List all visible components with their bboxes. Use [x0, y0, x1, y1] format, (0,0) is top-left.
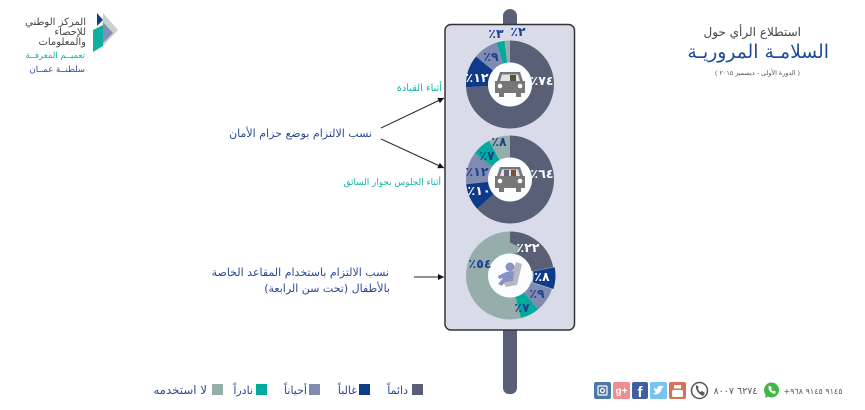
value labels: ٦٤٪ [531, 166, 553, 181]
logo [25, 13, 118, 75]
legend: أحياناً [284, 382, 307, 397]
legend: غالباً [338, 382, 357, 397]
value labels: ٣٪ [488, 26, 504, 41]
logo text: المركز الوطني [25, 17, 86, 28]
value labels: ٩٪ [483, 49, 499, 64]
value labels: ٢٢٪ [517, 240, 540, 255]
logo mark [93, 13, 118, 52]
legend: دائماً [387, 382, 408, 397]
value labels: ٢٪ [510, 24, 526, 39]
label: passenger seat: أثناء الجلوس بجوار السائق [344, 176, 441, 188]
value labels: ١٢٪ [466, 164, 489, 179]
traffic light panel [445, 24, 574, 330]
logo text: والمعلومات [38, 37, 86, 48]
icon: car with driver [495, 72, 525, 97]
value labels: ١٠٪ [468, 183, 490, 198]
callout: child seat compliance [212, 266, 390, 295]
donut: seat belt while driving [466, 24, 553, 121]
traffic light pole [503, 9, 517, 394]
value labels: ٧٤٪ [531, 73, 553, 88]
logo tagline: تعميــم المعرفــة [25, 51, 86, 61]
title block [687, 24, 829, 77]
logo text: للإحصاء [54, 27, 86, 38]
legend [153, 382, 423, 397]
value labels: ٩٪ [529, 286, 545, 301]
donut: child seat use [469, 240, 550, 315]
callout: seat belt compliance: نسب الالتزام بوضع حزام الأمان [229, 126, 372, 140]
contact details [692, 382, 843, 398]
icon: whatsapp [764, 382, 779, 398]
value labels: ٧٪ [514, 300, 530, 315]
legend: لا استخدمه [153, 383, 207, 397]
value labels [469, 240, 550, 315]
whatsapp number: +٩٦٨ ٩١٤٥ ٩١٤٥ [783, 387, 843, 396]
arrow: to child seat donut [414, 276, 444, 278]
social icons: g+ [616, 386, 628, 397]
value labels: ٧٪ [479, 148, 495, 163]
value labels: ١٢٪ [466, 70, 489, 85]
phone number: ٨٠٠٧ ٦٢٧٤ [714, 386, 757, 397]
arrow: to driving donut [381, 98, 444, 128]
survey heading: استطلاع الرأي حول [704, 24, 801, 40]
main title: السلامـة المروريـة [687, 42, 829, 63]
arrow: to passenger donut [381, 139, 444, 168]
edition note: ( الدورة الأولى - ديسمبر ٢٠١٥ ) [715, 68, 800, 77]
logo text [25, 17, 86, 48]
callout: child seat compliance: نسب الالتزام باستخدام المقاعد الخاصة [212, 266, 389, 279]
label: while driving: أثناء القيادة [397, 81, 442, 94]
icon: car with passengers [495, 167, 525, 192]
value labels [466, 24, 553, 88]
social icons [594, 382, 686, 401]
legend: نادراً [233, 382, 253, 397]
value labels [466, 134, 553, 198]
callout: child seat compliance: بالأطفال (تحت سن الرابعة) [264, 281, 390, 295]
icon: phone [692, 382, 708, 398]
value labels: ٥٤٪ [469, 256, 491, 271]
value labels: ٨٪ [491, 134, 507, 149]
value labels: ٨٪ [534, 269, 550, 284]
icon: child car seat [498, 262, 522, 287]
donut: seat belt in passenger seat [466, 134, 553, 212]
logo country: سلطنــة عمــان [29, 65, 85, 75]
social icons: f [638, 384, 644, 401]
